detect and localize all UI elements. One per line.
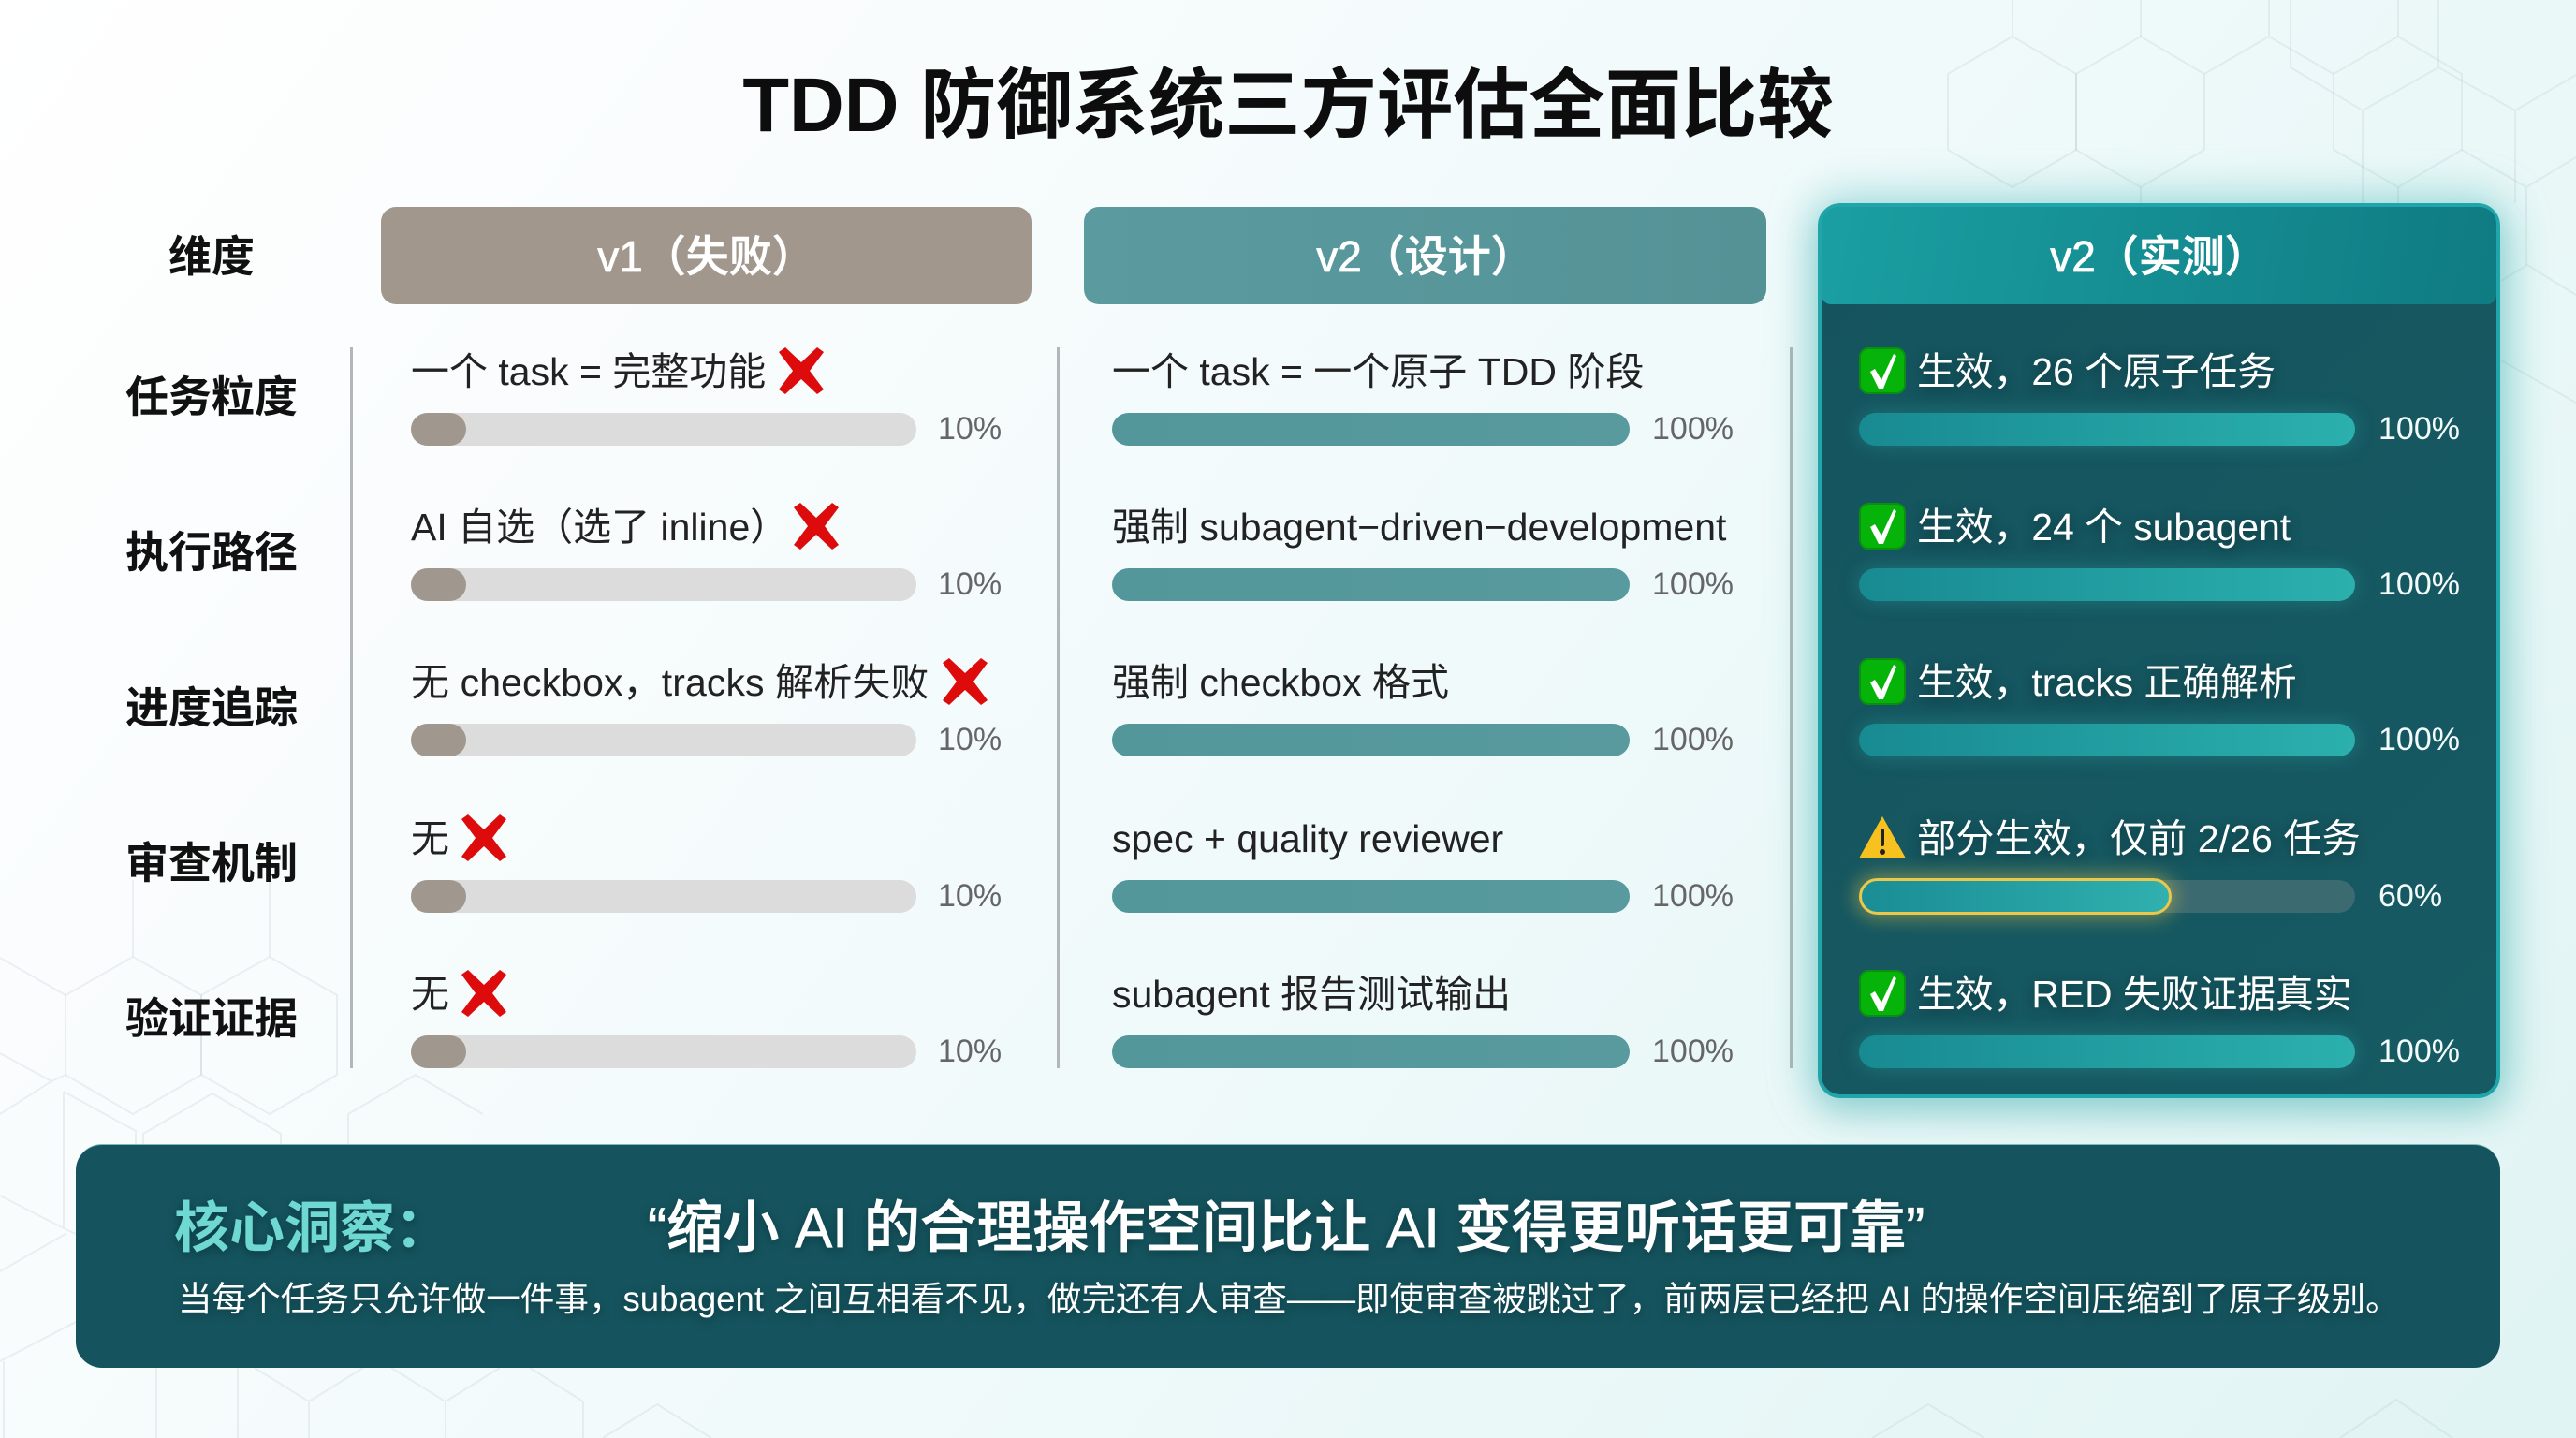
text: 一个 task = 完整功能 [411,350,766,393]
value: 60% [2378,878,2442,914]
progress bar [1859,1035,2355,1068]
row: execution path [1856,503,2460,607]
insight quote: “缩小 AI 的合理操作空间比让 AI 变得更听话更可靠” [648,1196,1925,1259]
v2 measured header [1822,207,2496,304]
row: verification evidence [411,970,1002,1069]
row: progress tracking [411,658,1002,757]
row: task granularity [411,347,1002,447]
icon: green check [1859,970,1906,1017]
text: 强制 checkbox 格式 [1112,661,1449,704]
row: progress tracking [1112,661,1734,757]
value: 100% [2378,1034,2460,1069]
row: verification evidence [1856,970,2460,1074]
value: 100% [2378,411,2460,447]
v1 header: v1（失败） [597,232,815,281]
v2 measured header: v2（实测） [2050,232,2268,281]
title: TDD 防御系统三方评估全面比较 [742,63,1834,148]
text: 无 checkbox，tracks 解析失败 [411,661,929,704]
progress bar [411,413,916,446]
value: 10% [938,1034,1002,1069]
progress bar [1112,568,1630,601]
icon: red cross [461,814,506,861]
icon: warning triangle [1859,816,1906,858]
insight label: 核心洞察： [174,1197,450,1259]
text: 部分生效，仅前 2/26 任务 [1917,817,2361,860]
row: verification evidence [1112,973,1734,1069]
text: 无 [411,817,449,860]
row: review mechanism [1844,816,2442,931]
label: review mechanism: 审查机制 [125,839,298,888]
value: 100% [2378,722,2460,757]
value: 10% [938,722,1002,757]
icon: green check [1859,503,1906,550]
value: 10% [938,878,1002,914]
progress bar [411,724,916,756]
progress bar fill [1859,878,2172,915]
value: 10% [938,566,1002,602]
progress bar track [1859,880,2355,913]
v1 header [381,207,1032,304]
value: 100% [1652,1034,1734,1069]
row: review mechanism [1112,817,1734,914]
text: 生效，tracks 正确解析 [1917,661,2297,704]
progress bar [1112,880,1630,913]
icon: red cross [461,970,506,1017]
column heading: dimension: 维度 [168,232,255,281]
progress bar [1112,413,1630,446]
icon: green check [1859,347,1906,394]
dimension labels [125,373,298,1043]
row: review mechanism [411,814,1002,914]
icon: red cross [943,658,988,705]
row: task granularity [1856,347,2460,451]
row: execution path [1112,506,1734,602]
value: 100% [1652,878,1734,914]
label: task granularity: 任务粒度 [125,373,298,421]
panel: core insight [76,1144,2500,1368]
label: execution path: 执行路径 [125,528,298,577]
icon: green check [1859,658,1906,705]
progress bar [1859,413,2355,446]
panel: v1 column [411,347,1002,1069]
text: 强制 subagent−driven−development [1112,506,1726,549]
divider [1790,347,1793,1068]
row: progress tracking [1856,658,2460,762]
divider [1057,347,1060,1068]
insight explanation: 当每个任务只允许做一件事，subagent 之间互相看不见，做完还有人审查——即使审查被跳过了，前两层已经把 AI 的操作空间压缩到了原子级别。 [178,1280,2400,1318]
row: task granularity [1112,350,1734,447]
value: 100% [2378,566,2460,602]
divider [350,347,353,1068]
text: 生效，26 个原子任务 [1917,350,2276,393]
value: 100% [1652,411,1734,447]
v2 design header: v2（设计） [1316,232,1534,281]
label: verification evidence: 验证证据 [125,994,298,1043]
value: 100% [1652,566,1734,602]
label: progress tracking: 进度追踪 [125,683,298,732]
panel: v2 measured column [1818,203,2500,1098]
icon: red cross [779,347,824,394]
panel: v2 design column [1112,350,1734,1069]
progress bar [411,568,916,601]
text: subagent 报告测试输出 [1112,973,1511,1016]
text: 生效，RED 失败证据真实 [1917,973,2352,1016]
progress bar [1859,568,2355,601]
value: 100% [1652,722,1734,757]
text: 无 [411,973,449,1016]
icon: red cross [794,503,839,550]
progress bar [411,880,916,913]
progress bar [1112,724,1630,756]
text: spec + quality reviewer [1112,817,1503,860]
progress bar [411,1035,916,1068]
v2 design header [1084,207,1766,304]
text: 一个 task = 一个原子 TDD 阶段 [1112,350,1644,393]
row: execution path [411,503,1002,602]
text: 生效，24 个 subagent [1917,506,2291,549]
progress bar [1859,724,2355,756]
progress bar [1112,1035,1630,1068]
value: 10% [938,411,1002,447]
text: AI 自选（选了 inline） [411,506,788,549]
